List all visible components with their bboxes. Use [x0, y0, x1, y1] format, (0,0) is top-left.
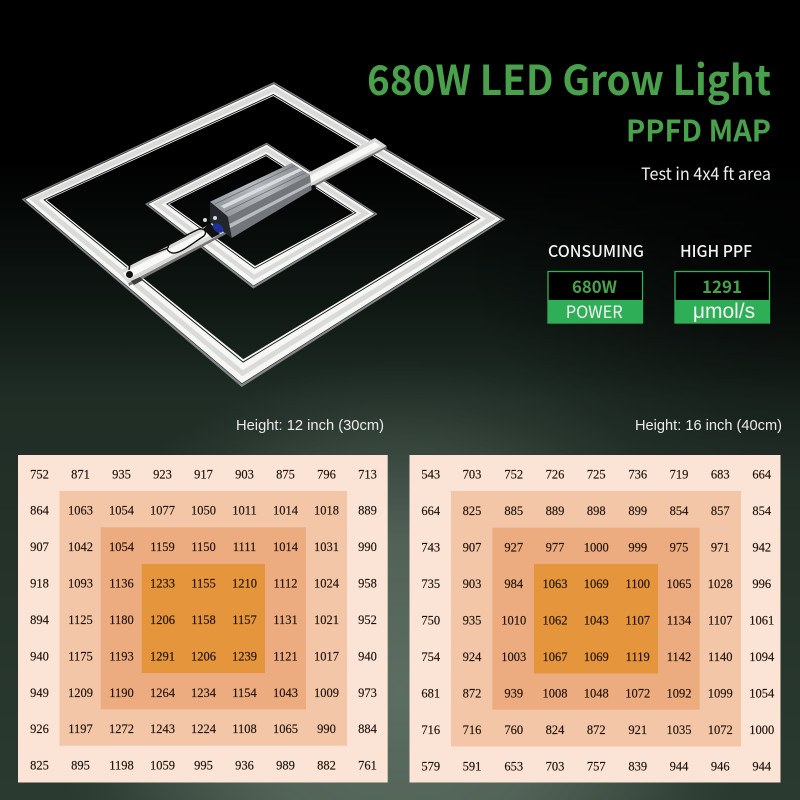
- readings grid 16 inch: 977: [546, 540, 564, 554]
- stat box: [548, 272, 642, 323]
- readings grid 12 inch: 1125: [68, 613, 93, 627]
- readings grid 16 inch: 716: [463, 723, 481, 737]
- readings grid 12 inch: 1224: [191, 722, 217, 736]
- readings grid 16 inch: 1048: [584, 686, 609, 700]
- readings grid 12 inch: 952: [358, 613, 377, 627]
- readings grid 16 inch: 1107: [625, 613, 650, 627]
- readings grid 12 inch: 1206: [191, 649, 216, 663]
- readings grid 16 inch: 885: [504, 504, 523, 518]
- readings grid 16 inch: 927: [504, 540, 523, 554]
- readings grid 12 inch: 895: [71, 759, 90, 773]
- readings grid 16 inch: 664: [752, 467, 772, 481]
- readings grid 12 inch: 1108: [232, 722, 257, 736]
- readings grid 12 inch: 1190: [109, 686, 134, 700]
- readings grid 12 inch: 761: [358, 759, 377, 773]
- readings grid 16 inch: 750: [421, 613, 440, 627]
- readings grid 12 inch: 1159: [150, 540, 175, 554]
- readings grid 16 inch: 579: [421, 759, 440, 773]
- readings grid 16 inch: 872: [587, 723, 606, 737]
- readings grid 12 inch: 752: [30, 467, 49, 481]
- readings grid 16 inch: 898: [587, 504, 606, 518]
- readings grid 12 inch: 1059: [150, 759, 175, 773]
- readings grid 12 inch: 1112: [273, 576, 298, 590]
- label: height 16 inch: Height: 16 inch (40cm): [635, 417, 782, 434]
- readings grid 16 inch: 921: [628, 723, 647, 737]
- readings grid 12 inch: 935: [112, 467, 131, 481]
- readings grid 16 inch: 1142: [667, 650, 691, 664]
- readings grid 12 inch: 907: [30, 540, 49, 554]
- readings grid 12 inch: 1054: [109, 504, 135, 518]
- readings grid 16 inch: 1094: [749, 650, 775, 664]
- readings grid 16 inch: 889: [546, 504, 564, 518]
- readings grid 12 inch: 1121: [273, 649, 298, 663]
- readings grid 16 inch: 999: [628, 540, 647, 554]
- readings grid 12 inch: 1272: [109, 722, 134, 736]
- readings grid 16 inch: 683: [711, 467, 730, 481]
- readings grid 12 inch: 1158: [191, 613, 216, 627]
- readings grid 16 inch: 935: [463, 613, 481, 627]
- readings grid 16 inch: 942: [752, 540, 771, 554]
- readings grid 12 inch: 1011: [232, 504, 257, 518]
- driver box: [210, 163, 312, 238]
- stat box: μmol/s: [693, 300, 755, 323]
- readings grid 12 inch: 1021: [314, 613, 339, 627]
- readings grid 16 inch: 971: [711, 540, 730, 554]
- readings grid 12 inch: 825: [30, 759, 49, 773]
- readings grid 12 inch: 1131: [273, 613, 298, 627]
- readings grid 12 inch: 1154: [232, 686, 258, 700]
- stat heading: CONSUMING: [548, 238, 644, 262]
- readings grid 16 inch: 1054: [749, 686, 775, 700]
- readings grid 12 inch: 1009: [314, 686, 339, 700]
- readings grid 16 inch: 899: [628, 504, 647, 518]
- readings grid 12 inch: 1018: [314, 504, 339, 518]
- readings grid 16 inch: 872: [463, 686, 481, 700]
- readings grid 12 inch: 1239: [232, 649, 257, 663]
- readings grid 12 inch: 1093: [68, 576, 93, 590]
- readings grid 12 inch: 871: [71, 467, 90, 481]
- readings grid 12 inch: 1264: [150, 686, 176, 700]
- readings grid 16 inch: 716: [421, 723, 440, 737]
- readings grid 16 inch: 1107: [708, 613, 733, 627]
- title: 680W LED Grow Light: [367, 47, 771, 107]
- readings grid 16 inch: 757: [587, 759, 606, 773]
- readings grid 16 inch: 543: [421, 467, 440, 481]
- readings grid 16 inch: 760: [504, 723, 523, 737]
- readings grid 16 inch: 736: [628, 467, 647, 481]
- readings grid 16 inch: 653: [504, 759, 523, 773]
- readings grid 16 inch: 719: [670, 467, 688, 481]
- readings grid 16 inch: 1100: [625, 577, 650, 591]
- readings grid 12 inch: 1193: [109, 649, 134, 663]
- readings grid 16 inch: 1003: [501, 650, 526, 664]
- readings grid 12 inch: 995: [194, 759, 213, 773]
- readings grid 16 inch: 996: [752, 577, 771, 591]
- readings grid 16 inch: 1063: [542, 577, 568, 591]
- panel: PPFD map 16 inch: [410, 455, 780, 782]
- readings grid 12 inch: 1017: [314, 649, 339, 663]
- product image: LED grow light fixture: [22, 82, 505, 387]
- readings grid 16 inch: 1067: [542, 650, 568, 664]
- stat: consuming power: [548, 238, 644, 323]
- readings grid 16 inch: 825: [463, 504, 481, 518]
- readings grid 16 inch: 1008: [542, 686, 568, 700]
- readings grid 16 inch: 975: [670, 540, 688, 554]
- readings grid 16 inch: 946: [711, 759, 730, 773]
- readings grid 12 inch: 1210: [232, 576, 257, 590]
- readings grid 12 inch: 1155: [191, 576, 216, 590]
- readings grid 16 inch: 1134: [667, 613, 692, 627]
- readings grid 12 inch: 918: [30, 576, 49, 590]
- readings grid 12 inch: 882: [317, 759, 336, 773]
- readings grid 16 inch: 1061: [749, 613, 774, 627]
- readings grid 16 inch: 664: [421, 504, 441, 518]
- readings grid 16 inch: 743: [421, 540, 440, 554]
- readings grid 16 inch: 726: [546, 467, 564, 481]
- readings grid 12 inch: 1157: [232, 613, 257, 627]
- readings grid 12 inch: 940: [358, 649, 377, 663]
- readings grid 12 inch: 864: [30, 504, 50, 518]
- readings grid 12 inch: 1054: [109, 540, 135, 554]
- readings grid 12 inch: 1197: [68, 722, 93, 736]
- readings grid 16 inch: 1069: [584, 577, 609, 591]
- readings grid 16 inch: 1065: [666, 577, 692, 591]
- readings grid 16 inch: 903: [463, 577, 481, 591]
- stat box: POWER: [566, 298, 623, 323]
- readings grid 16 inch: 1099: [708, 686, 733, 700]
- label: height 12 inch: Height: 12 inch (30cm): [236, 417, 384, 434]
- test area note: Test in 4x4 ft area: [641, 160, 771, 185]
- stat box: 1291: [702, 273, 742, 298]
- readings grid 16 inch: 824: [546, 723, 565, 737]
- readings grid 12 inch: 903: [235, 467, 254, 481]
- readings grid 12 inch: 1065: [273, 722, 298, 736]
- readings grid 12 inch: 1063: [68, 504, 93, 518]
- readings grid 16 inch: 1069: [584, 650, 609, 664]
- readings grid 12 inch: 1111: [233, 540, 256, 554]
- readings grid 16 inch: 681: [421, 686, 440, 700]
- readings grid 12 inch: 1209: [68, 686, 93, 700]
- readings grid 12 inch: 796: [317, 467, 336, 481]
- readings grid 12 inch: 1206: [150, 613, 175, 627]
- readings grid 16 inch: 944: [752, 759, 772, 773]
- readings grid 12 inch: 1043: [273, 686, 298, 700]
- readings grid 12 inch: 1024: [314, 576, 340, 590]
- readings grid 12 inch: 923: [153, 467, 172, 481]
- readings grid 12 inch: 990: [317, 722, 336, 736]
- readings grid 12 inch: 990: [358, 540, 377, 554]
- readings grid 12 inch: 1014: [273, 540, 299, 554]
- readings grid 12 inch: 989: [276, 759, 295, 773]
- readings grid 16 inch: 1010: [501, 613, 526, 627]
- readings grid 12 inch: 1233: [150, 576, 175, 590]
- readings grid 12 inch: 936: [235, 759, 254, 773]
- readings grid 16 inch: 944: [670, 759, 689, 773]
- power cable: [129, 229, 205, 270]
- readings grid 12 inch: 1077: [150, 504, 175, 518]
- readings grid 12 inch: 973: [358, 686, 377, 700]
- readings grid 16 inch: 754: [421, 650, 441, 664]
- readings grid 16 inch: 735: [421, 577, 440, 591]
- readings grid 16 inch: 1072: [625, 686, 650, 700]
- readings grid 16 inch: 1043: [584, 613, 609, 627]
- readings grid 16 inch: 857: [711, 504, 730, 518]
- readings grid 12 inch: 1014: [273, 504, 299, 518]
- readings grid 12 inch: 884: [358, 722, 378, 736]
- readings grid 12 inch: 1175: [68, 649, 93, 663]
- readings grid 12 inch: 1150: [191, 540, 216, 554]
- readings grid 12 inch: 1136: [109, 576, 134, 590]
- readings grid 16 inch: 703: [546, 759, 564, 773]
- cross bar: [118, 138, 387, 286]
- readings grid 12 inch: 1291: [150, 649, 175, 663]
- readings grid 16 inch: 1092: [666, 686, 692, 700]
- stat box: [675, 272, 770, 323]
- readings grid 16 inch: 924: [463, 650, 482, 664]
- readings grid 16 inch: 1000: [749, 723, 774, 737]
- readings grid 16 inch: 939: [504, 686, 523, 700]
- readings grid 12 inch: 940: [30, 649, 49, 663]
- stat heading: HIGH PPF: [680, 238, 752, 262]
- readings grid 12 inch: 894: [30, 613, 50, 627]
- readings grid 12 inch: 1050: [191, 504, 216, 518]
- readings grid 16 inch: 984: [504, 577, 524, 591]
- blue connector: [203, 216, 225, 238]
- readings grid 12 inch: 949: [30, 686, 49, 700]
- readings grid 12 inch: 1234: [191, 686, 217, 700]
- readings grid 16 inch: 839: [628, 759, 647, 773]
- readings grid 12 inch: 958: [358, 576, 377, 590]
- readings grid 12 inch: 1042: [68, 540, 93, 554]
- readings grid 16 inch: 752: [504, 467, 523, 481]
- readings grid 12 inch: 1198: [109, 759, 134, 773]
- panel: PPFD map 12 inch: [18, 455, 388, 782]
- readings grid 12 inch: 917: [194, 467, 213, 481]
- inner rectangular frame: [145, 143, 378, 288]
- readings grid 16 inch: 1035: [666, 723, 692, 737]
- readings grid 12 inch: [30, 467, 378, 773]
- stat box: 680W: [572, 273, 617, 298]
- readings grid 16 inch: [421, 467, 775, 773]
- readings grid 16 inch: 1000: [584, 540, 609, 554]
- readings grid 16 inch: 907: [463, 540, 481, 554]
- readings grid 12 inch: 926: [30, 722, 49, 736]
- stat: high PPF: [675, 238, 770, 323]
- readings grid 16 inch: 1140: [708, 650, 733, 664]
- readings grid 12 inch: 889: [358, 504, 377, 518]
- subtitle: PPFD MAP: [626, 107, 771, 151]
- readings grid 16 inch: 854: [670, 504, 689, 518]
- readings grid 12 inch: 713: [358, 467, 377, 481]
- readings grid 16 inch: 1062: [542, 613, 568, 627]
- readings grid 12 inch: 875: [276, 467, 295, 481]
- readings grid 16 inch: 591: [463, 759, 481, 773]
- readings grid 16 inch: 725: [587, 467, 606, 481]
- readings grid 12 inch: 1243: [150, 722, 175, 736]
- readings grid 16 inch: 1072: [708, 723, 733, 737]
- readings grid 16 inch: 1028: [708, 577, 733, 591]
- readings grid 16 inch: 854: [752, 504, 772, 518]
- readings grid 16 inch: 1119: [626, 650, 650, 664]
- readings grid 16 inch: 703: [463, 467, 481, 481]
- readings grid 12 inch: 1180: [109, 613, 134, 627]
- readings grid 12 inch: 1031: [314, 540, 339, 554]
- outer square frame: [22, 82, 505, 387]
